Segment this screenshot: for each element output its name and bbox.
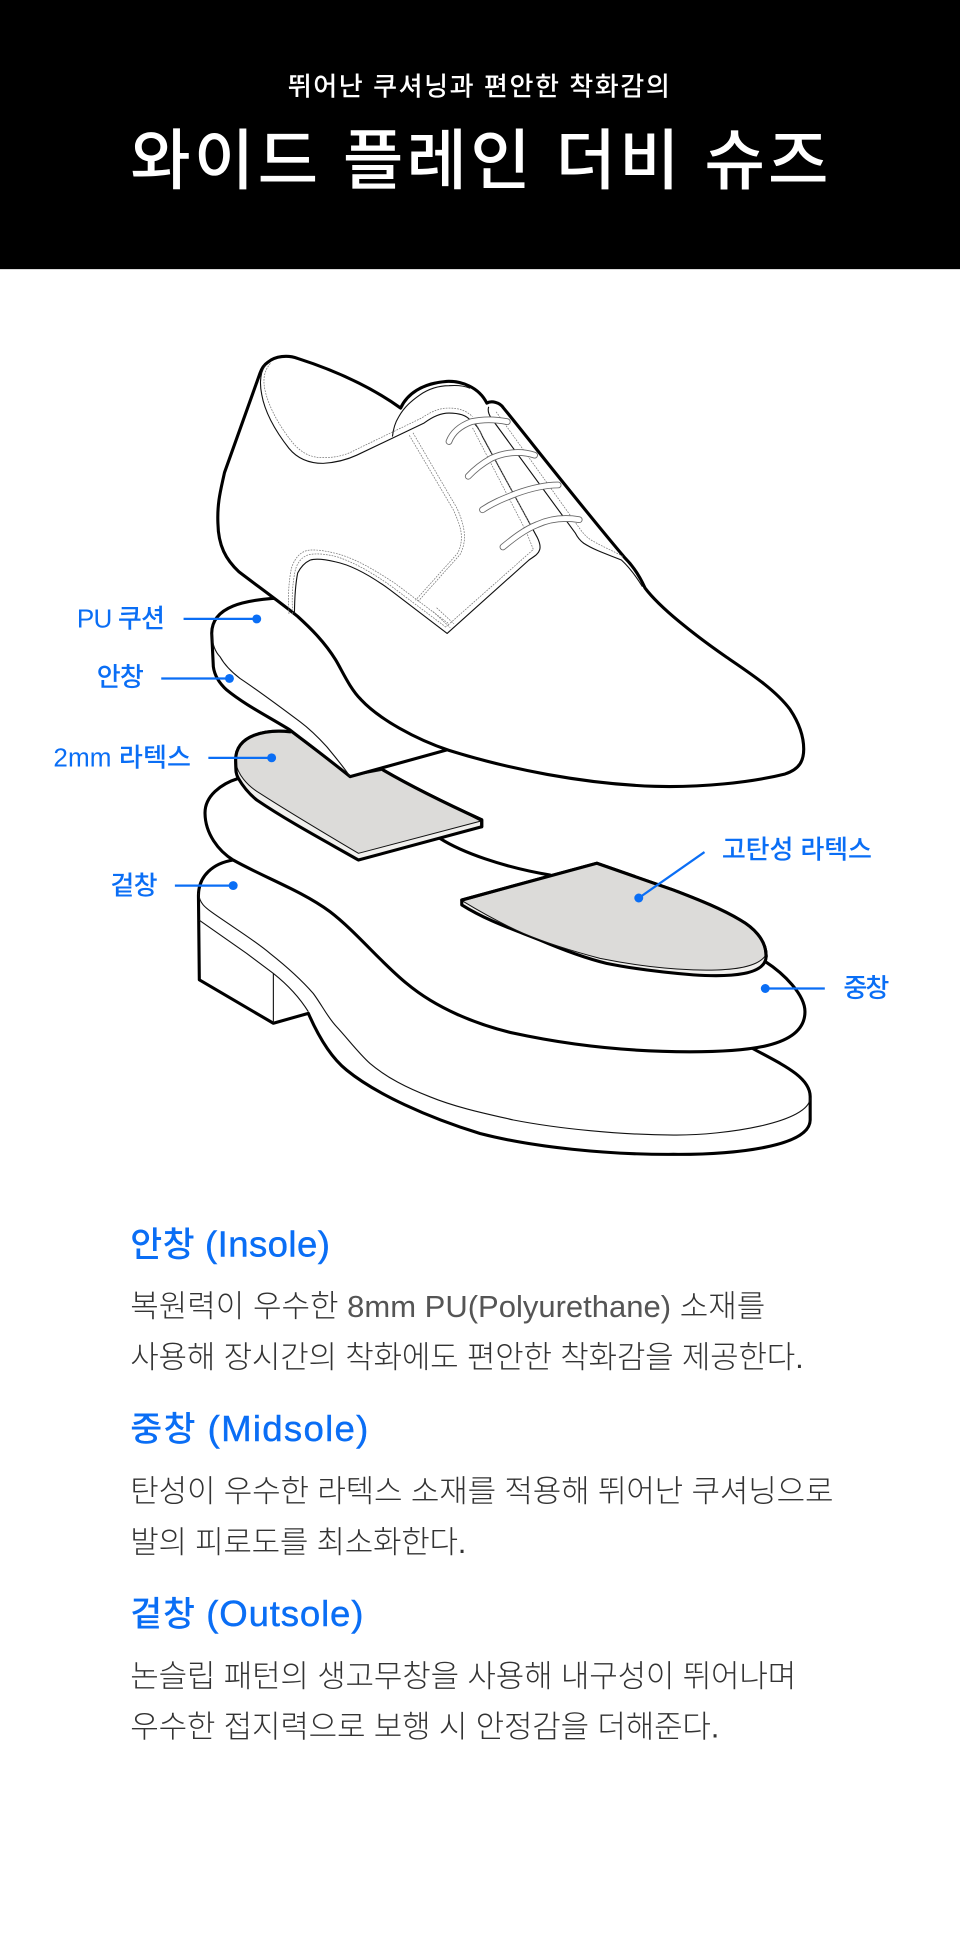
midsole text [130, 1474, 833, 1560]
heading: midsole: 중창 (Midsole) [130, 1408, 368, 1449]
facing stitching [447, 424, 533, 626]
section: outsole description [130, 1593, 796, 1745]
2mm latex heel pad [236, 731, 482, 860]
collar stitching [264, 363, 473, 458]
midsole layer [205, 770, 805, 1052]
vamp edge [488, 407, 642, 587]
callout: outsole: 겉창 [110, 870, 158, 900]
exploded shoe diagram [198, 356, 810, 1154]
collar and eyestay seam [260, 365, 540, 633]
callout: 2mm latex [53, 743, 276, 773]
quarter seam stitching [409, 435, 461, 600]
callout: outsole [110, 870, 238, 900]
callout: insole [97, 662, 234, 692]
header banner [0, 0, 960, 269]
outsole layer [198, 860, 810, 1154]
outsole text [130, 1659, 796, 1745]
midsole text: 발의 피로도를 최소화한다. [130, 1525, 466, 1560]
insole text: 사용해 장시간의 착화에도 편안한 착화감을 제공한다. [130, 1340, 804, 1375]
callout: PU cushion [77, 604, 261, 634]
heading: outsole: 겉창 (Outsole) [130, 1593, 363, 1634]
callout: PU cushion: PU 쿠션 [77, 604, 165, 634]
callout: midsole: 중창 [843, 973, 889, 1003]
outsole text: 논슬립 패턴의 생고무창을 사용해 내구성이 뛰어나며 [130, 1659, 796, 1694]
insole text: 복원력이 우수한 8mm PU(Polyurethane) 소재를 [130, 1289, 765, 1324]
tongue [392, 386, 470, 437]
insole text [130, 1289, 804, 1375]
callout: 2mm latex: 2mm 라텍스 [53, 743, 191, 773]
section: insole description [130, 1223, 804, 1375]
laces [449, 420, 579, 547]
outsole text: 우수한 접지력으로 보행 시 안정감을 더해준다. [130, 1710, 719, 1745]
heading: insole: 안창 (Insole) [130, 1223, 330, 1264]
callout: midsole [761, 973, 889, 1003]
title: 와이드 플레인 더비 슈즈 [130, 124, 829, 198]
callout: insole: 안창 [97, 662, 144, 692]
callout: high-resilience latex: 고탄성 라텍스 [722, 834, 872, 864]
shoe upper [218, 356, 804, 787]
insole with PU cushion [212, 598, 447, 777]
midsole text: 탄성이 우수한 라텍스 소재를 적용해 뛰어난 쿠셔닝으로 [130, 1474, 833, 1509]
subtitle: 뛰어난 쿠셔닝과 편안한 착화감의 [288, 72, 670, 102]
section: midsole description [130, 1408, 833, 1560]
callout: high-resilience latex [634, 834, 872, 902]
high-resilience latex forefoot pad [462, 863, 766, 976]
